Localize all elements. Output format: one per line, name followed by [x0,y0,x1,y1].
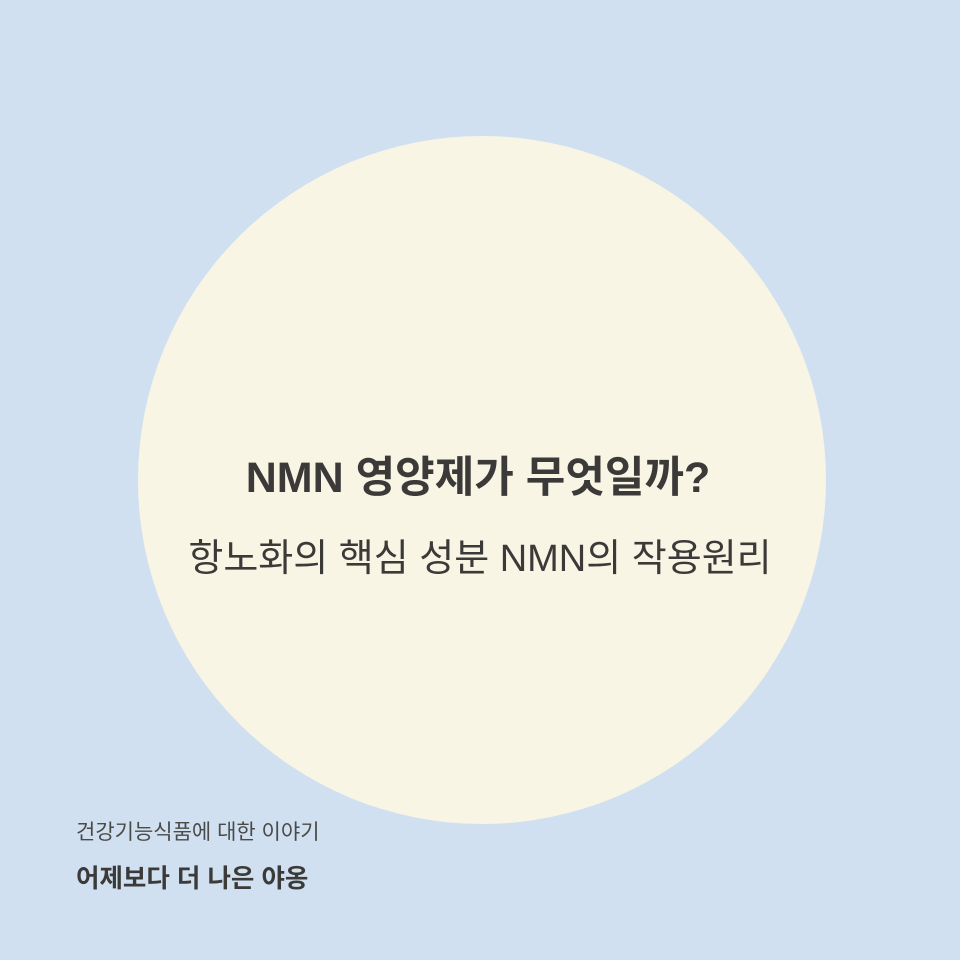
subtitle: 항노화의 핵심 성분 NMN의 작용원리 [188,538,772,580]
circle panel [138,136,826,824]
footer caption: 건강기능식품에 대한 이야기 [76,821,320,844]
footer brand: 어제보다 더 나은 야옹 [76,865,308,893]
title: NMN 영양제가 무엇일까? [246,454,710,502]
